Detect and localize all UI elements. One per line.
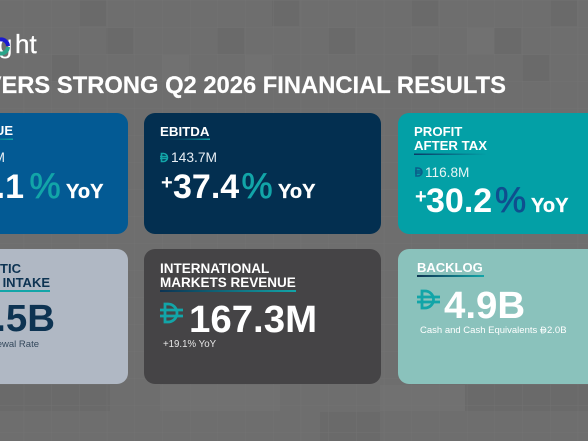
profit amount: 116.8M: [425, 165, 469, 180]
international note: +19.1% YoY: [163, 339, 217, 350]
cash note: 2.0B: [547, 325, 567, 336]
profit growth: +: [415, 186, 427, 208]
EBITDA growth: [161, 167, 316, 206]
EBITDA growth: %: [242, 167, 273, 206]
panel: backlog: [398, 249, 588, 384]
international heading: MARKETS REVENUE: [160, 275, 296, 290]
profit heading: PROFIT: [414, 124, 462, 139]
panel: profit after tax: [398, 113, 588, 234]
revenue growth: %: [30, 167, 61, 206]
international heading: [160, 261, 296, 290]
profit growth: 30.2: [426, 182, 492, 220]
intake heading: [0, 261, 50, 290]
revenue growth: YoY: [66, 181, 104, 203]
panel: EBITDA: [144, 113, 381, 234]
cash note: Cash and Cash Equivalents: [420, 325, 537, 336]
revenue growth: [0, 167, 104, 206]
profit heading: [414, 124, 487, 153]
profit growth: [415, 181, 569, 220]
panel: domestic intake: [0, 249, 128, 384]
EBITDA growth: +: [161, 172, 173, 194]
panel: revenue: [0, 113, 128, 234]
EBITDA growth: YoY: [278, 181, 316, 203]
international heading: INTERNATIONAL: [160, 261, 269, 276]
EBITDA amount: 143.7M: [171, 150, 217, 165]
profit growth: %: [495, 181, 526, 220]
profit heading: AFTER TAX: [414, 138, 487, 153]
backlog heading: BACKLOG: [417, 260, 483, 275]
profit growth: YoY: [531, 195, 569, 217]
logo: partial wordmark with ring: [0, 29, 37, 59]
panel: international markets revenue: [144, 249, 381, 384]
EBITDA heading: EBITDA: [160, 124, 210, 139]
backlog value: 4.9B: [444, 284, 525, 327]
logo: partial wordmark with ring: ht: [15, 29, 37, 59]
international value: 167.3M: [189, 298, 317, 341]
EBITDA growth: 37.4: [173, 168, 239, 206]
